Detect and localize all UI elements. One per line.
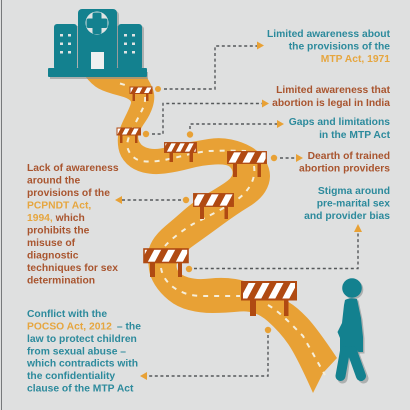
road centre dashes [120,84,325,375]
text: PCPNDT: techniques for sex [27,263,118,274]
text: stigma: Stigma around [318,186,390,197]
text: POCSO conflict: POCSO Act, 2012 [27,322,112,332]
text: POCSO conflict: from sexual abuse – [27,346,126,358]
text: dearth of providers: Dearth of trained [308,151,390,162]
text: limited awareness about provisions: MTP Act, 1971 [321,54,390,65]
text: POCSO conflict: the confidentiality [27,371,115,382]
text: POCSO conflict: which contradicts with [26,358,138,370]
text: stigma: pre-marital sex [317,198,390,210]
text: POCSO conflict: Conflict with the [27,309,107,320]
barrier 5 [194,194,233,219]
text: limited awareness about provisions: the provisions of the [289,41,390,52]
text: PCPNDT: PCPNDT Act, [27,200,91,212]
icon: hospital [48,9,148,79]
barrier 4 [228,152,266,177]
text: dearth of providers: abortion providers [299,164,390,174]
text: PCPNDT: 1994, [27,213,53,224]
barrier 3 [165,143,196,162]
connector: PCPNDT [115,196,189,204]
text: PCPNDT: which [53,213,85,224]
text: PCPNDT: misuse of [27,238,76,249]
connector: limited awareness about the act [155,42,264,92]
barrier 2 [117,128,140,143]
text: PCPNDT: diagnostic [27,250,79,262]
text: POCSO conflict: law to protect children [27,334,137,345]
winding road [85,76,337,393]
icon: person walking [338,278,364,378]
connector: stigma [186,224,362,272]
connector: POCSO [140,327,271,380]
barrier 6 [144,249,188,277]
text: PCPNDT: prohibits the [27,226,90,236]
text: PCPNDT: determination [27,276,95,286]
text: limited awareness about provisions: Limited awareness about [267,29,391,40]
text: abortion is legal: Limited awareness that [276,85,391,96]
connector: dearth of providers [271,154,303,162]
text: PCPNDT: provisions of the [27,188,110,199]
text: PCPNDT: Lack of awareness [27,163,119,174]
text: gaps and limitations: in the MTP Act [319,130,391,141]
connector: legality awareness [143,100,269,137]
barrier 1 [130,87,152,101]
text: gaps and limitations: Gaps and limitations [289,117,390,128]
text: abortion is legal: abortion is legal in India [272,98,390,109]
text: PCPNDT: around the [27,176,80,186]
text: POCSO conflict: clause of the MTP Act [27,384,134,394]
barrier 7 [242,282,296,316]
text: stigma: and provider bias [304,211,390,222]
connector: gaps and limitations [187,120,284,138]
text: POCSO conflict: – the [117,322,141,332]
